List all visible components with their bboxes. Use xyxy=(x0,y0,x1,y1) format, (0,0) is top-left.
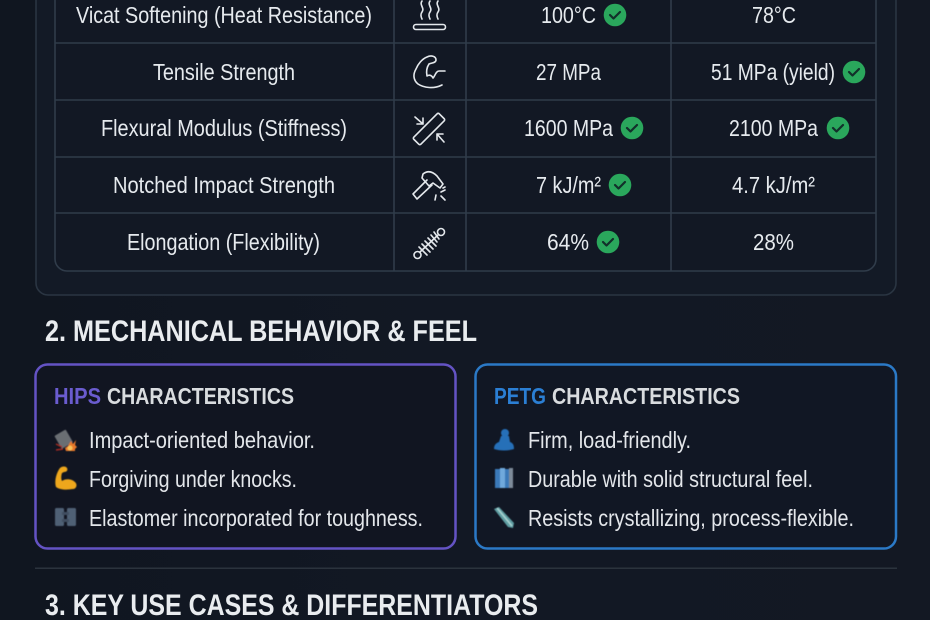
panel: HIPS characteristics: Forgiving under knocks. xyxy=(89,466,297,492)
icon: check HIPS flexural xyxy=(621,117,643,139)
row: flexural modulus xyxy=(101,113,849,145)
icon: check HIPS impact xyxy=(609,174,631,196)
icon: elastomer xyxy=(55,508,76,526)
row: tensile strength: 27 MPa xyxy=(536,59,601,85)
HIPS title: HIPS xyxy=(54,383,101,409)
row: flexural modulus: 2100 MPa xyxy=(729,115,818,141)
icon: check PETG tensile xyxy=(843,61,865,83)
icon: check HIPS heat xyxy=(604,4,626,26)
row: elongation: 28% xyxy=(753,229,794,255)
icon: check PETG flexural xyxy=(827,117,849,139)
panel: property comparison xyxy=(36,0,896,295)
row: Vicat softening: 78°C xyxy=(752,2,796,28)
row: Vicat softening: 100°C xyxy=(541,2,596,28)
icon: crystal xyxy=(494,507,514,528)
row: flexural modulus: Flexural Modulus (Stiffness) xyxy=(101,115,347,141)
row: notched impact strength: 4.7 kJ/m² xyxy=(732,172,815,198)
panel: HIPS characteristics: Elastomer incorporated for toughness. xyxy=(89,505,423,531)
row: elongation xyxy=(127,228,794,258)
icon: load xyxy=(494,429,514,450)
HIPS title: CHARACTERISTICS xyxy=(107,383,294,409)
panel: HIPS characteristics: Impact-oriented behavior. xyxy=(89,427,315,453)
panel: PETG characteristics: Durable with solid structural feel. xyxy=(528,466,813,492)
icon: flexed arm xyxy=(414,56,445,88)
icon: bending bar xyxy=(413,113,445,145)
icon: heat xyxy=(414,1,446,30)
row: elongation: 64% xyxy=(547,229,589,255)
PETG title: PETG xyxy=(494,383,546,409)
row: notched impact strength xyxy=(113,172,815,200)
icon: hammer xyxy=(413,172,445,200)
icon: check HIPS elongation xyxy=(597,231,619,253)
PETG title: CHARACTERISTICS xyxy=(552,383,740,409)
row: Vicat softening xyxy=(76,1,796,30)
row: tensile strength: Tensile Strength xyxy=(153,59,295,85)
panel: HIPS characteristics xyxy=(36,364,456,548)
row: elongation: Elongation (Flexibility) xyxy=(127,229,320,255)
row: flexural modulus: 1600 MPa xyxy=(524,115,613,141)
row: notched impact strength: 7 kJ/m² xyxy=(536,172,601,198)
panel: PETG characteristics xyxy=(476,364,896,548)
icon: impact xyxy=(54,429,77,451)
panel: PETG characteristics: Firm, load-friendly. xyxy=(528,427,691,453)
row: tensile strength: 51 MPa (yield) xyxy=(711,59,835,85)
icon: spring xyxy=(414,228,444,258)
row: notched impact strength: Notched Impact Strength xyxy=(113,172,335,198)
row: tensile strength xyxy=(153,56,865,88)
icon: flexed bicep xyxy=(55,466,76,490)
heading: section 2: 2. MECHANICAL BEHAVIOR & FEEL xyxy=(45,315,477,348)
panel: PETG characteristics: Resists crystallizing, process-flexible. xyxy=(528,505,854,531)
icon: structural beam xyxy=(495,468,513,488)
row: Vicat softening: Vicat Softening (Heat Resistance) xyxy=(76,2,372,28)
comparison table xyxy=(55,0,876,271)
